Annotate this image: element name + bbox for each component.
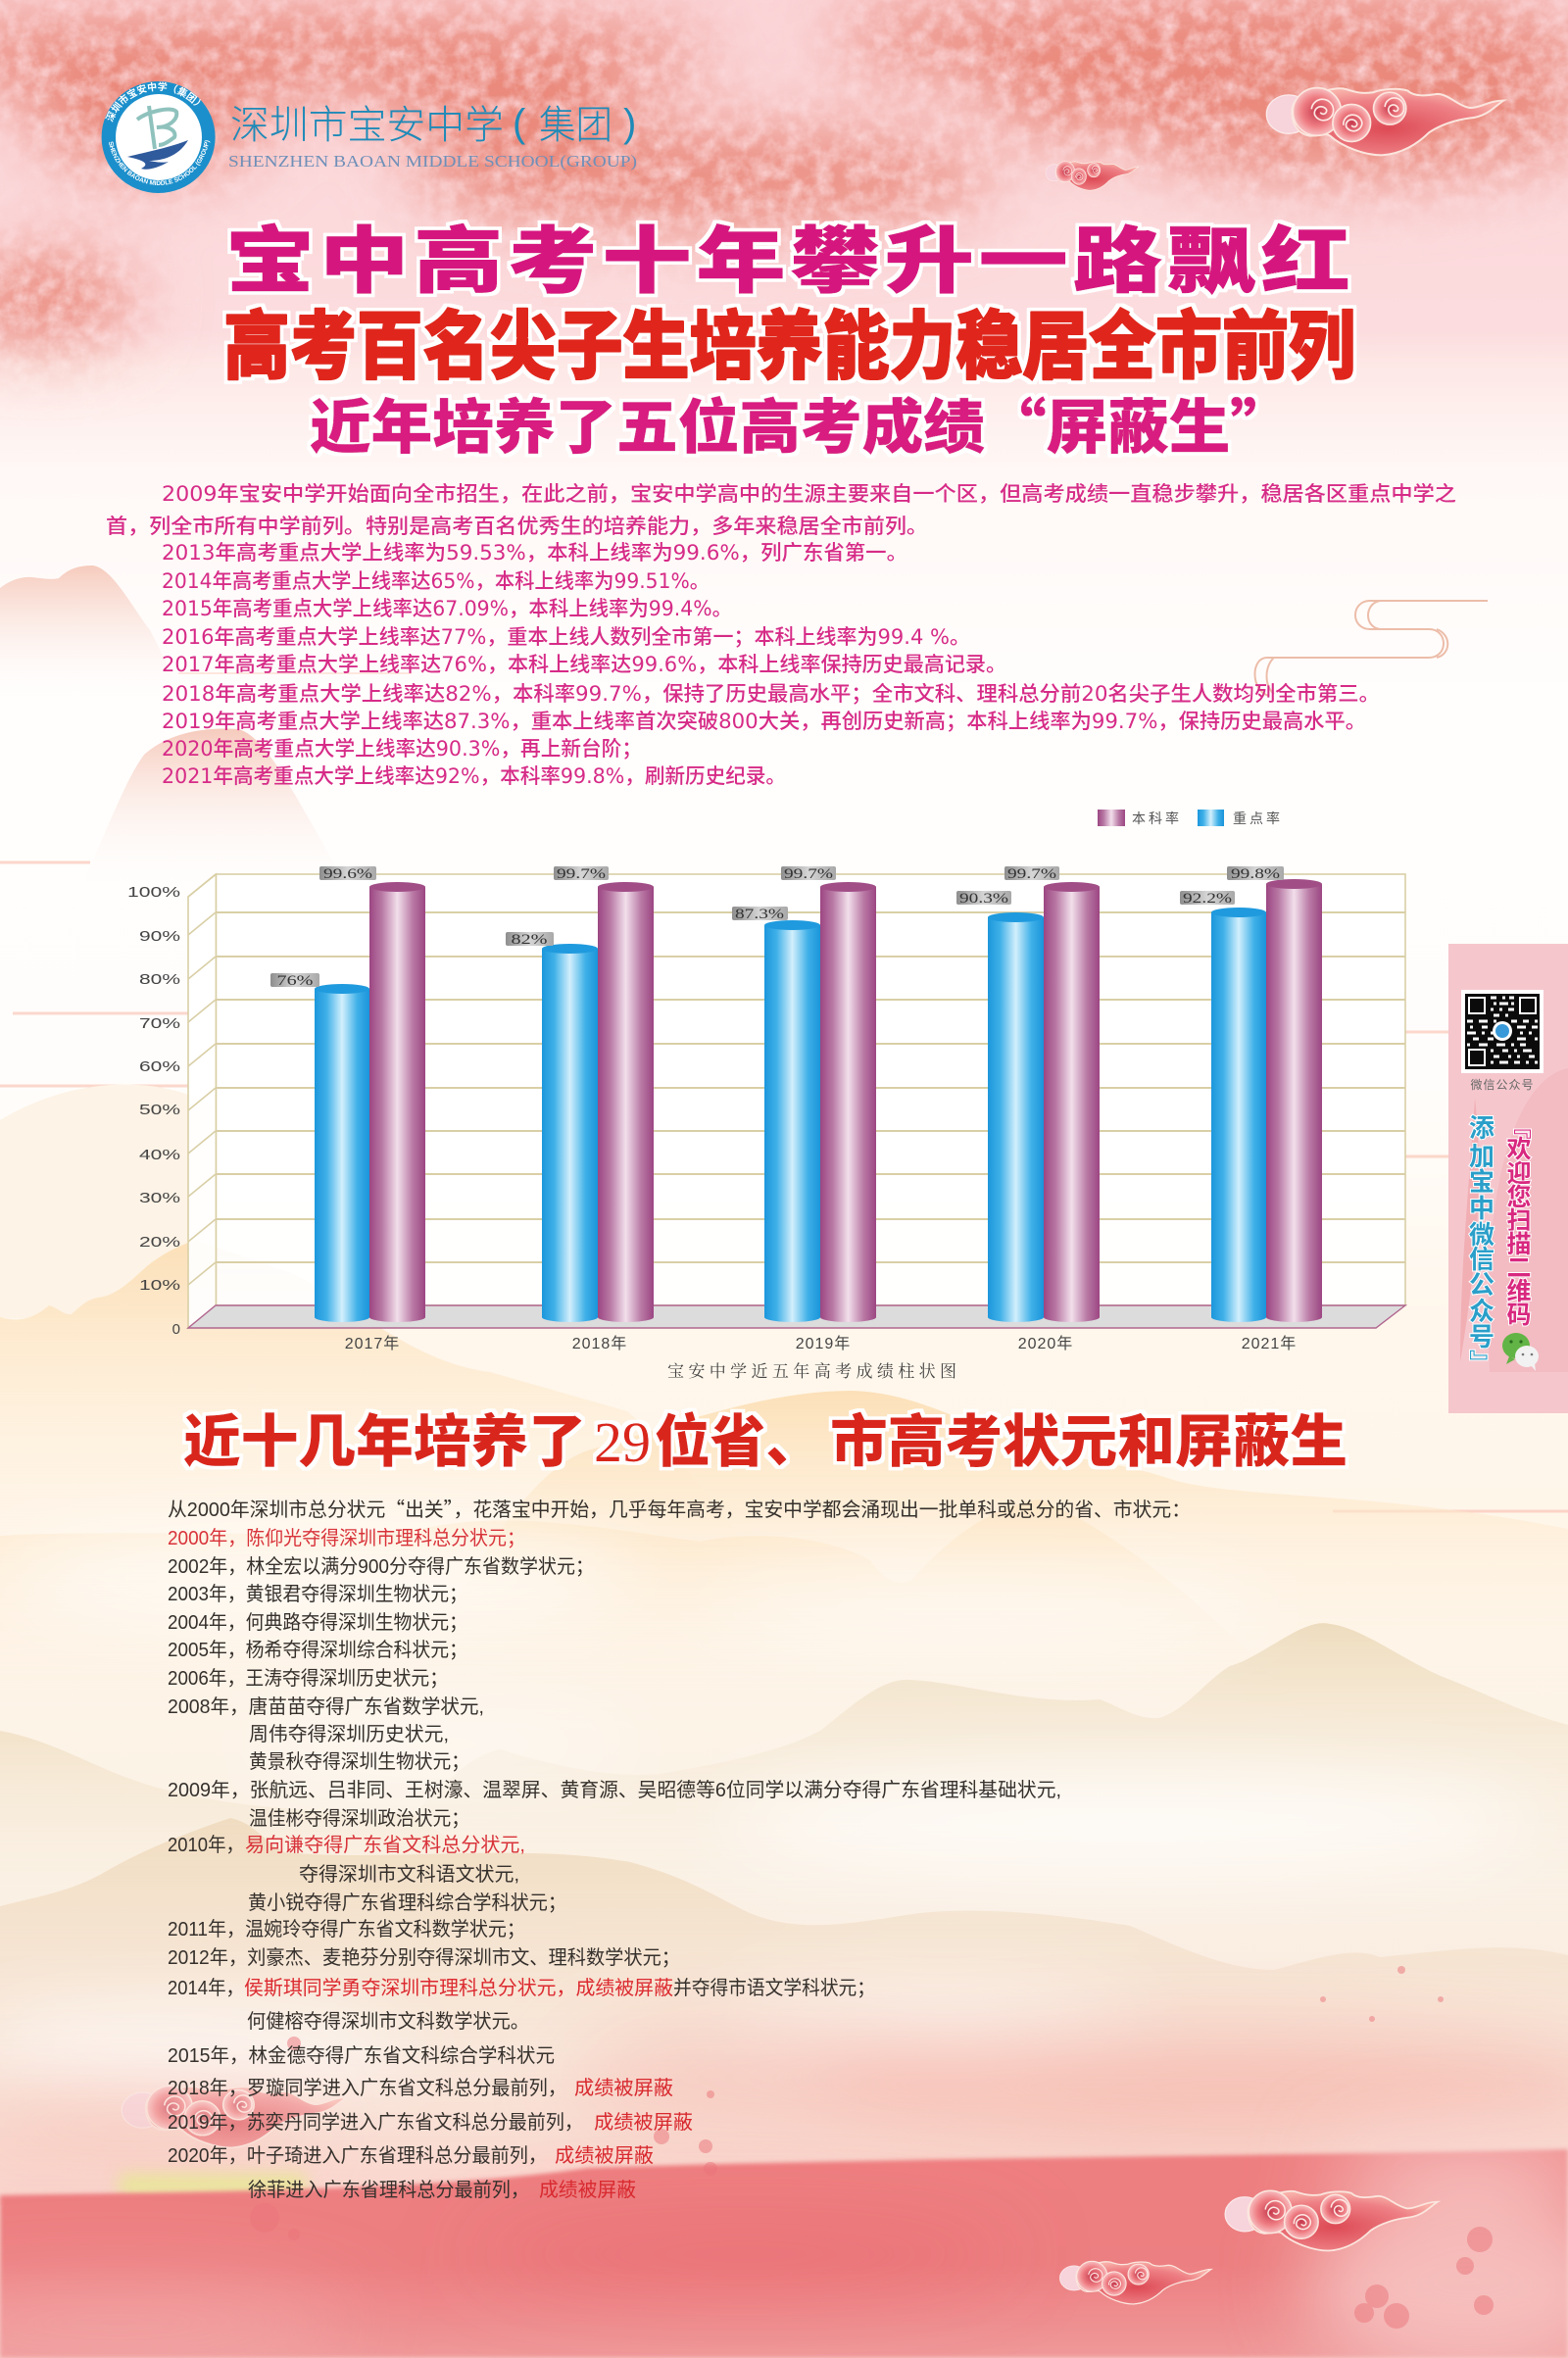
y axis labels: 90% xyxy=(139,928,180,945)
2016 result: 2016年高考重点大学上线率达77%，重本上线人数列全市第一；本科上线率为99.4 %。 xyxy=(162,625,970,649)
bars 2021: 99.8% xyxy=(1231,866,1280,882)
list 2020 xyxy=(168,2144,654,2201)
vertical text: add wechat: 信 xyxy=(1469,1245,1494,1274)
decoration: scroll outline xyxy=(1254,601,1488,696)
emblem ring text bottom: SHENZHEN BAOAN MIDDLE SCHOOL (GROUP) xyxy=(109,140,210,185)
y axis labels: 100% xyxy=(127,884,180,901)
bar chart: five-year results xyxy=(127,810,1405,1382)
vertical text: welcome: 欢 xyxy=(1506,1136,1532,1163)
list 2014: 2014年， xyxy=(168,1977,244,1999)
heading: champions section xyxy=(183,1410,1348,1474)
list 2018: 2018年，罗璇同学进入广东省文科总分最前列， xyxy=(168,2077,566,2099)
list 2003: 2003年，黄银君夺得深圳生物状元； xyxy=(168,1583,467,1605)
list 2008: 黄景秋夺得深圳生物状元； xyxy=(249,1750,469,1773)
2018 result: 2018年高考重点大学上线率达82%，本科率99.7%，保持了历史最高水平；全市文科、理科总分前20名尖子生人数均列全市第三。 xyxy=(162,682,1380,706)
2020 result: 2020年高考重点大学上线率达90.3%，再上新台阶； xyxy=(162,737,642,761)
school name: ) xyxy=(623,102,636,145)
y axis labels: 70% xyxy=(139,1015,180,1032)
title: line one: 宝中高考十年攀升一路飘红 xyxy=(225,221,1355,302)
school name: 集团 xyxy=(539,104,612,147)
bars 2019: 99.7% xyxy=(784,866,833,882)
intro paragraph xyxy=(106,482,1456,538)
list 2009 xyxy=(168,1779,1061,1830)
2017 result: 2017年高考重点大学上线率达76%，本科上线率达99.6%，本科上线率保持历史最高记录。 xyxy=(162,653,1006,676)
list 2002: 2002年，林全宏以满分900分夺得广东省数学状元； xyxy=(168,1555,594,1578)
list 2014 xyxy=(168,1977,875,2033)
logo: school emblem xyxy=(102,81,216,193)
chart legend xyxy=(1098,810,1283,826)
bars 2019: 87.3% xyxy=(735,907,784,922)
list 2015: 2015年，林金德夺得广东省文科综合学科状元 xyxy=(168,2044,555,2067)
bars 2018 xyxy=(506,866,654,1322)
bars 2019 xyxy=(732,866,876,1322)
list 2008: 周伟夺得深圳历史状元, xyxy=(249,1723,449,1745)
bars 2017: 99.6% xyxy=(323,866,372,882)
y axis labels: 30% xyxy=(139,1190,180,1206)
x axis labels: 2020年 xyxy=(1018,1335,1073,1352)
decoration: faint cloud left xyxy=(122,2086,347,2147)
vertical text: add wechat: 宝 xyxy=(1469,1167,1494,1197)
vertical text: add wechat: 公 xyxy=(1469,1270,1494,1300)
text block: champions list xyxy=(168,1494,1191,2201)
vertical text: welcome: 维 xyxy=(1506,1278,1532,1305)
list 2011: 2011年，温婉玲夺得广东省文科数学状元； xyxy=(168,1918,525,1940)
side panel: wechat QR xyxy=(1448,944,1568,1413)
chart caption: 宝安中学近五年高考成绩柱状图 xyxy=(667,1357,956,1382)
list 2010: 夺得深圳市文科语文状元, xyxy=(299,1863,519,1886)
list 2020: 成绩被屏蔽 xyxy=(539,2179,636,2201)
list 2014: 并夺得市语文学科状元； xyxy=(673,1977,875,1999)
x axis labels: 2017年 xyxy=(345,1335,400,1352)
y axis labels: 20% xyxy=(139,1234,180,1251)
list 2006: 2006年，王涛夺得深圳历史状元； xyxy=(168,1667,448,1690)
x axis labels: 2021年 xyxy=(1242,1335,1297,1352)
bars 2021: 92.2% xyxy=(1183,891,1232,907)
vertical text: add wechat xyxy=(1466,1113,1495,1375)
bars 2017: 76% xyxy=(276,973,314,989)
heading: champions section: 市高考状元和屏蔽生 xyxy=(830,1410,1348,1474)
emblem ring text top: 深圳市宝安中学（集团） xyxy=(105,82,201,122)
school name english: SHENZHEN BAOAN MIDDLE SCHOOL(GROUP) xyxy=(228,152,637,171)
title: line two: 高考百名尖子生培养能力稳居全市前列 xyxy=(223,306,1355,389)
list 2018: 成绩被屏蔽 xyxy=(574,2077,673,2099)
list 2000: 2000年，陈仰光夺得深圳市理科总分状元； xyxy=(168,1527,525,1549)
school name: 深圳市宝安中学 xyxy=(230,104,504,147)
2013 result: 2013年高考重点大学上线率为59.53%，本科上线率为99.6%，列广东省第一。 xyxy=(162,541,907,565)
bars 2017 xyxy=(270,866,425,1322)
vertical text: welcome: 迎 xyxy=(1506,1160,1532,1188)
vertical text: welcome: 您 xyxy=(1506,1184,1532,1211)
vertical text: welcome xyxy=(1503,1114,1532,1329)
2021 result: 2021年高考重点大学上线率达92%，本科率99.8%，刷新历史纪录。 xyxy=(162,764,786,788)
x axis labels xyxy=(345,1335,1297,1352)
list intro: 从2000年深圳市总分状元“出关”，花落宝中开始，几乎每年高考，宝安中学都会涌现出一批单科或总分的省、市状元： xyxy=(168,1494,1191,1522)
bars 2020: 99.7% xyxy=(1007,866,1056,882)
vertical text: add wechat: 』 xyxy=(1466,1350,1495,1375)
list 2010: 2010年， xyxy=(168,1834,244,1856)
icon: wechat xyxy=(1502,1333,1539,1371)
x axis labels: 2018年 xyxy=(572,1335,627,1352)
vertical text: welcome: 扫 xyxy=(1506,1207,1532,1235)
decoration: large cloud bottom right xyxy=(1225,2190,1438,2251)
bars 2018: 99.7% xyxy=(557,866,606,882)
vertical text: add wechat: 微 xyxy=(1469,1220,1494,1250)
decoration: small cloud top xyxy=(1046,162,1139,190)
vertical text: welcome: 码 xyxy=(1506,1302,1532,1329)
bars 2020: 90.3% xyxy=(959,891,1008,907)
list 2010: 易向谦夺得广东省文科总分状元, xyxy=(245,1834,525,1856)
list 2010: 黄小锐夺得广东省理科综合学科状元； xyxy=(248,1891,566,1914)
vertical text: add wechat: 众 xyxy=(1469,1297,1494,1326)
list 2014: 何健榕夺得深圳市文科数学状元。 xyxy=(247,2010,529,2033)
QR caption: 微信公众号 xyxy=(1470,1078,1535,1092)
mountain left upper xyxy=(0,565,186,706)
bars 2021 xyxy=(1180,866,1322,1322)
school name: ( xyxy=(513,102,526,145)
emblem swoosh xyxy=(127,140,188,170)
bars 2018: 82% xyxy=(512,932,547,948)
heading: champions section: 位省、 xyxy=(655,1410,821,1474)
2019 result: 2019年高考重点大学上线率达87.3%，重本上线率首次突破800大关，再创历史新高；本科上线率为99.7%，保持历史最高水平。 xyxy=(162,710,1366,733)
chart grid xyxy=(188,874,1405,1328)
heading: champions section: 近十几年培养了 xyxy=(183,1410,586,1474)
y axis labels: 0 xyxy=(172,1321,180,1338)
list 2008 xyxy=(168,1695,484,1773)
title: line three: 近年培养了五位高考成绩 “屏蔽生” xyxy=(310,380,1292,466)
chart legend: 本科率 xyxy=(1132,811,1182,826)
list 2009: 温佳彬夺得深圳政治状元； xyxy=(249,1807,469,1830)
list 2014: 侯斯琪同学勇夺深圳市理科总分状元，成绩被屏蔽 xyxy=(244,1977,673,1999)
vertical text: add wechat: 号 xyxy=(1469,1322,1494,1351)
y axis labels: 40% xyxy=(139,1147,180,1163)
emblem letter mark xyxy=(137,106,176,149)
intro paragraph: 2009年宝安中学开始面向全市招生，在此之前，宝安中学高中的生源主要来自一个区，但高考成绩一直稳步攀升，稳居各区重点中学之 xyxy=(162,482,1456,506)
list 2010 xyxy=(168,1834,566,1914)
y axis labels: 60% xyxy=(139,1058,180,1075)
vertical text: welcome: 二 xyxy=(1506,1254,1532,1282)
y axis labels: 50% xyxy=(139,1102,180,1118)
y axis labels xyxy=(127,884,180,1338)
intro paragraph: 首，列全市所有中学前列。特别是高考百名优秀生的培养能力，多年来稳居全市前列。 xyxy=(106,515,928,538)
chart legend: 重点率 xyxy=(1233,811,1283,826)
list 2020: 成绩被屏蔽 xyxy=(555,2144,654,2167)
vertical text: welcome: 『 xyxy=(1503,1114,1531,1140)
list 2020: 徐菲进入广东省理科总分最前列， xyxy=(248,2179,529,2201)
list 2008: 2008年，唐苗苗夺得广东省数学状元, xyxy=(168,1695,484,1718)
list 2009: 2009年，张航远、吕非同、王树濠、温翠屏、黄育源、吴昭德等6位同学以满分夺得广东省理科基础状元, xyxy=(168,1779,1061,1801)
bars 2020 xyxy=(956,866,1100,1322)
school name xyxy=(230,102,636,147)
y axis labels: 80% xyxy=(139,971,180,988)
vertical text: welcome: 描 xyxy=(1506,1231,1532,1258)
decoration: large cloud top right xyxy=(1266,88,1504,155)
list 2012: 2012年，刘豪杰、麦艳芬分别夺得深圳市文、理科数学状元； xyxy=(168,1946,680,1969)
x axis labels: 2019年 xyxy=(796,1335,851,1352)
2015 result: 2015年高考重点大学上线率达67.09%，本科上线率为99.4%。 xyxy=(162,597,732,620)
y axis labels: 10% xyxy=(139,1277,180,1294)
vertical text: add wechat: 中 xyxy=(1469,1194,1494,1223)
2014 result: 2014年高考重点大学上线率达65%，本科上线率为99.51%。 xyxy=(162,569,710,593)
list 2004: 2004年，何典路夺得深圳生物状元； xyxy=(168,1611,467,1634)
vertical text: add wechat: 添 xyxy=(1469,1113,1494,1143)
text block: school results paragraph xyxy=(106,482,1456,788)
vertical text: add wechat: 加 xyxy=(1469,1142,1494,1171)
decoration: small cloud bottom xyxy=(1059,2261,1211,2304)
list 2005: 2005年，杨希夺得深圳综合科状元； xyxy=(168,1639,467,1661)
list 2019: 成绩被屏蔽 xyxy=(594,2111,693,2134)
list 2020: 2020年，叶子琦进入广东省理科总分最前列， xyxy=(168,2144,547,2167)
list 2019: 2019年，苏奕丹同学进入广东省文科总分最前列， xyxy=(168,2111,583,2134)
chart floor xyxy=(188,1305,1405,1328)
QR code xyxy=(1461,990,1544,1073)
heading: champions section: 29 xyxy=(594,1410,651,1474)
